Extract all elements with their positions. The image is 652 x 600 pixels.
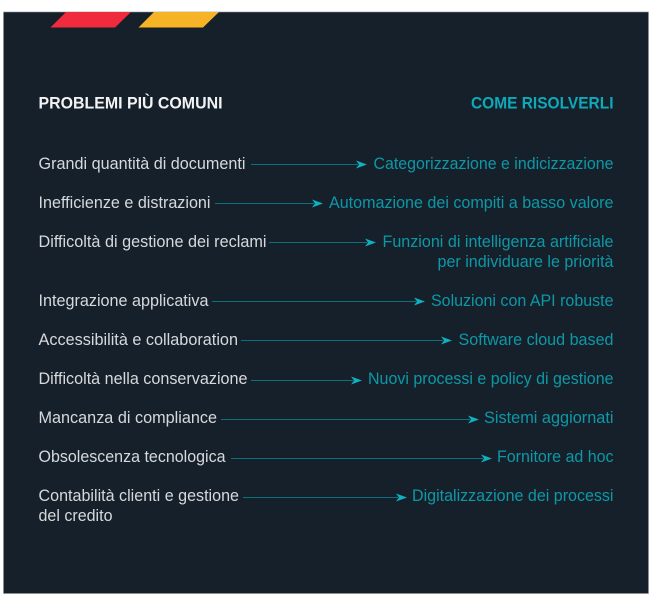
row 4 — [38, 292, 614, 310]
row 8: Fornitore ad hoc — [497, 448, 614, 466]
row 7: Mancanza di compliance — [38, 409, 217, 427]
row 9: del credito — [38, 507, 112, 525]
red parallelogram accent — [50, 12, 131, 28]
row 2 — [38, 194, 614, 212]
row 3: per individuare le priorità — [438, 253, 614, 271]
row 3: Difficoltà di gestione dei reclami — [38, 233, 266, 251]
row 7 — [38, 409, 614, 427]
row 4: Integrazione applicativa — [38, 292, 209, 310]
row 1: Grandi quantità di documenti — [38, 155, 246, 173]
row 2: Inefficienze e distrazioni — [38, 194, 210, 212]
yellow parallelogram accent — [138, 12, 219, 28]
row 9: Digitalizzazione dei processi — [412, 487, 614, 505]
row 6 — [38, 370, 614, 388]
row 3: Funzioni di intelligenza artificiale — [382, 233, 614, 251]
row 6: Nuovi processi e policy di gestione — [368, 370, 614, 388]
row 9: Contabilità clienti e gestione — [38, 487, 239, 505]
heading: problems: PROBLEMI PIÙ COMUNI — [38, 94, 222, 112]
row 8 — [38, 448, 614, 466]
row 2: Automazione dei compiti a basso valore — [329, 194, 614, 212]
row 4: Soluzioni con API robuste — [431, 292, 614, 310]
row 9 — [38, 487, 614, 525]
row 5 — [38, 331, 614, 349]
row 1: Categorizzazione e indicizzazione — [374, 155, 614, 173]
row 7: Sistemi aggiornati — [484, 409, 614, 427]
row 5: Software cloud based — [458, 331, 614, 349]
heading: solutions: COME RISOLVERLI — [471, 94, 614, 112]
row 6: Difficoltà nella conservazione — [38, 370, 248, 388]
row 1 — [38, 155, 614, 173]
row 3 — [38, 233, 614, 271]
row 8: Obsolescenza tecnologica — [38, 448, 226, 466]
row 5: Accessibilità e collaboration — [38, 331, 238, 349]
